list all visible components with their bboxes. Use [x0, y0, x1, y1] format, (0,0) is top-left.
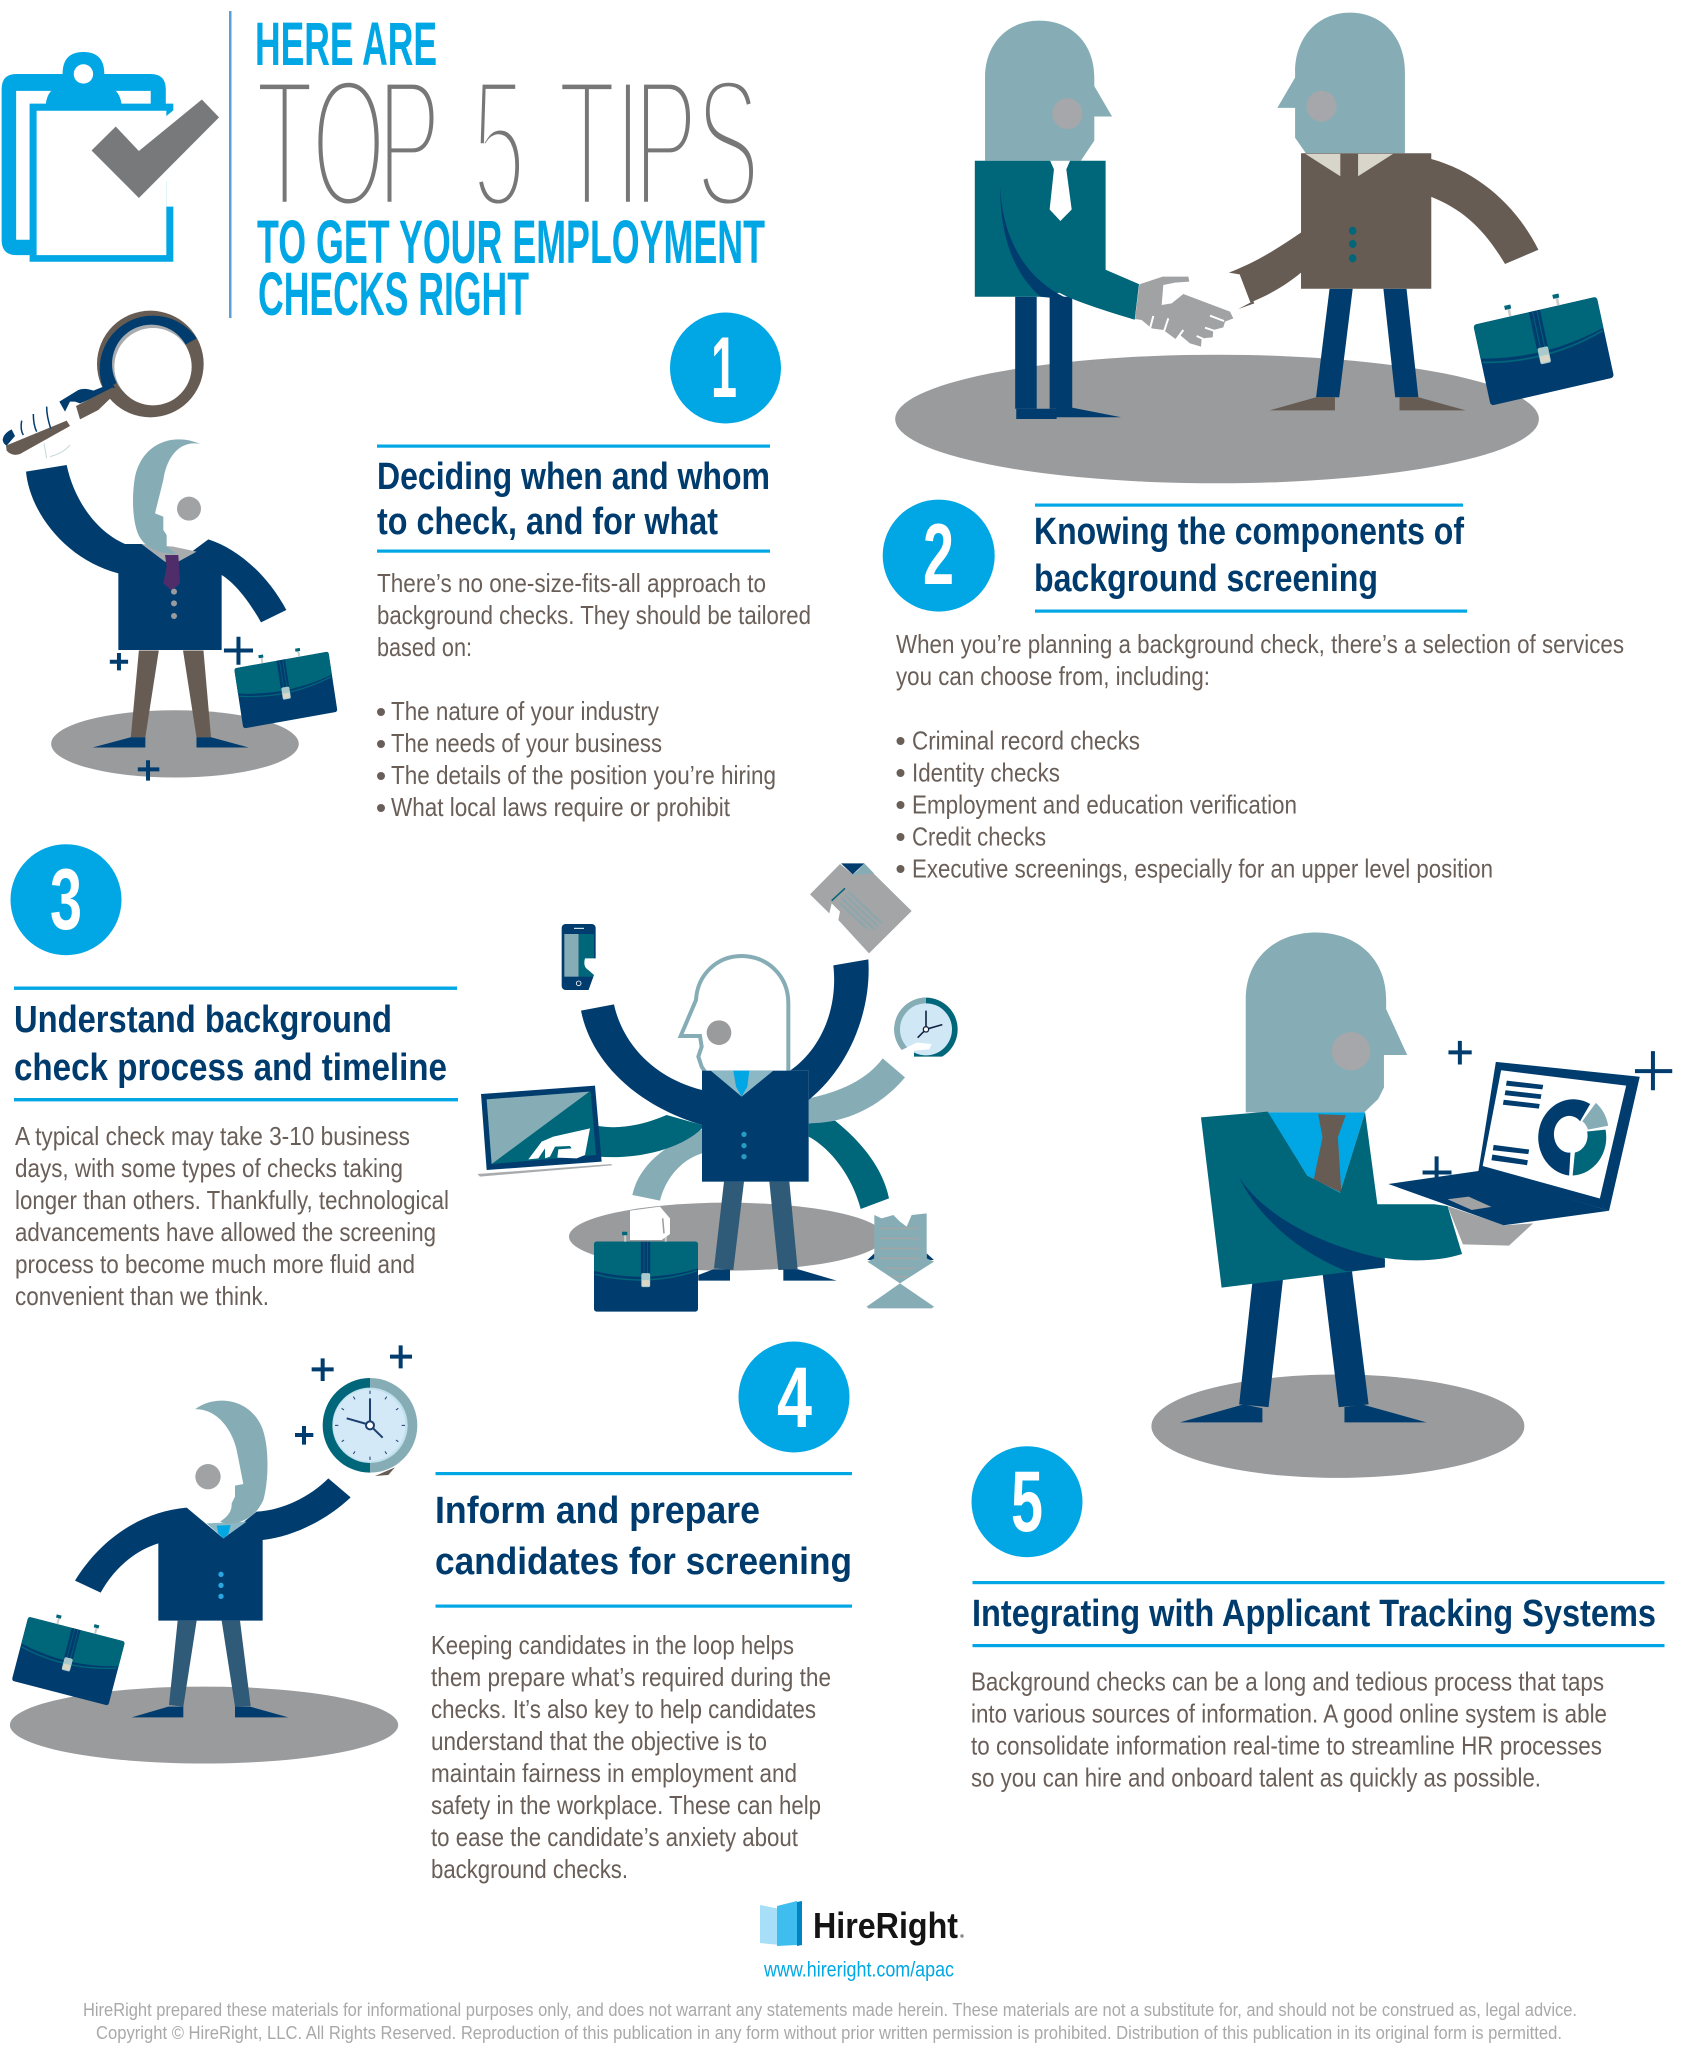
laptop	[477, 1086, 612, 1177]
step 4 body text: understand that the objective is to	[431, 1726, 767, 1756]
title: HERE ARE	[255, 10, 437, 78]
step 5 body text: so you can hire and onboard talent as quickly as possible.	[971, 1763, 1541, 1793]
step 2 heading: Knowing the components of	[1034, 511, 1464, 553]
step 4 heading: Inform and prepare	[435, 1490, 760, 1532]
step 4 body text: checks. It’s also key to help candidates	[431, 1694, 816, 1724]
step 3 number badge: 3	[50, 852, 82, 948]
step 2 heading: background screening	[1034, 558, 1378, 600]
step 1 heading	[377, 444, 770, 553]
title	[255, 10, 765, 328]
clock	[893, 998, 962, 1063]
step 2 body text: Credit checks	[912, 822, 1046, 852]
header divider	[229, 11, 232, 318]
illustration: man with magnifying glass	[3, 311, 338, 781]
step 4 number badge	[738, 1342, 850, 1452]
title: TO GET YOUR EMPLOYMENT	[257, 208, 765, 276]
step 4 body text: maintain fairness in employment and	[431, 1758, 797, 1788]
step 1 heading: to check, and for what	[377, 501, 718, 543]
step 3 body text: A typical check may take 3-10 business	[15, 1121, 410, 1151]
step 4 heading: candidates for screening	[435, 1541, 852, 1583]
step 4 body text: safety in the workplace. These can help	[431, 1790, 821, 1820]
step 4 heading	[435, 1472, 852, 1608]
title: TOP 5 TIPS	[255, 41, 760, 247]
step 3 heading: Understand background	[14, 999, 392, 1041]
logo: HireRight: HireRight	[813, 1905, 958, 1946]
step 5 number badge	[972, 1446, 1082, 1557]
step 1 body text: What local laws require or prohibit	[391, 792, 731, 822]
step 3 body text	[15, 1121, 449, 1311]
step 2 body text	[896, 629, 1624, 884]
briefcase	[594, 1232, 698, 1312]
hand holding briefcase	[630, 1207, 670, 1240]
step 4 body text: background checks.	[431, 1854, 628, 1884]
step 1 body text	[377, 568, 811, 822]
step 4 body text: to ease the candidate’s anxiety about	[431, 1822, 799, 1852]
step 4 body text: Keeping candidates in the loop helps	[431, 1630, 794, 1660]
step 2 body text: Criminal record checks	[912, 726, 1140, 756]
step 1 body text: background checks. They should be tailored	[377, 600, 811, 630]
step 4 number badge: 4	[777, 1350, 812, 1446]
step 3 body text: advancements have allowed the screening	[15, 1217, 436, 1247]
step 1 body text: The details of the position you’re hiring	[391, 760, 776, 790]
document	[810, 863, 912, 953]
illustration: multitasking man with six arms	[477, 863, 962, 1312]
step 5 body text: Background checks can be a long and tedious process that taps	[971, 1667, 1604, 1697]
step 3 body text: process to become much more fluid and	[15, 1249, 415, 1279]
hourglass paper	[867, 1213, 934, 1308]
illustration: two businessmen shaking hands	[895, 13, 1614, 483]
step 3 body text: convenient than we think.	[15, 1281, 269, 1311]
step 1 body text: based on:	[377, 632, 472, 662]
step 4 body text	[431, 1630, 831, 1884]
illustration: man holding a clock	[10, 1345, 417, 1764]
logo: HireRight	[760, 1901, 964, 1946]
legal disclaimer: Copyright © HireRight, LLC. All Rights Reserved. Reproduction of this publication in any form without prior written permission is prohibited. Distribution of this publication in its original form is permitted.	[96, 2022, 1562, 2043]
step 5 body text: to consolidate information real-time to streamline HR processes	[971, 1731, 1602, 1761]
icon: briefcase	[1471, 285, 1614, 406]
step 2 number badge	[883, 500, 995, 612]
step 2 heading	[1034, 504, 1467, 613]
step 2 body text: Identity checks	[912, 758, 1060, 788]
step 5 body text: into various sources of information. A good online system is able	[971, 1699, 1607, 1729]
step 3 body text: days, with some types of checks taking	[15, 1153, 403, 1183]
step 3 heading: check process and timeline	[14, 1047, 447, 1089]
step 2 number badge: 2	[923, 507, 954, 603]
step 2 body text: Executive screenings, especially for an upper level position	[912, 854, 1493, 884]
step 5 body text	[971, 1667, 1607, 1793]
step 3 heading	[14, 986, 458, 1101]
phone	[562, 924, 597, 991]
step 1 body text: The needs of your business	[391, 728, 662, 758]
step 4 body text: them prepare what’s required during the	[431, 1662, 831, 1692]
step 1 number badge	[670, 312, 781, 424]
step 3 number badge	[10, 844, 122, 955]
title: CHECKS RIGHT	[258, 260, 529, 328]
step 1 body text: The nature of your industry	[391, 696, 659, 726]
legal disclaimer	[83, 1999, 1577, 2043]
step 2 body text: you can choose from, including:	[896, 661, 1210, 691]
step 1 heading: Deciding when and whom	[377, 456, 770, 498]
step 1 body text: There’s no one-size-fits-all approach to	[377, 568, 766, 598]
step 5 heading	[972, 1581, 1664, 1647]
website link: www.hireright.com/apac	[763, 1958, 954, 1982]
step 5 number badge: 5	[1011, 1454, 1043, 1550]
icon: clipboard with checkmark	[2, 52, 229, 262]
step 1 number badge: 1	[711, 320, 737, 416]
step 3 body text: longer than others. Thankfully, technological	[15, 1185, 449, 1215]
illustration: man with laptop	[1151, 933, 1672, 1478]
step 2 body text: Employment and education verification	[912, 790, 1297, 820]
